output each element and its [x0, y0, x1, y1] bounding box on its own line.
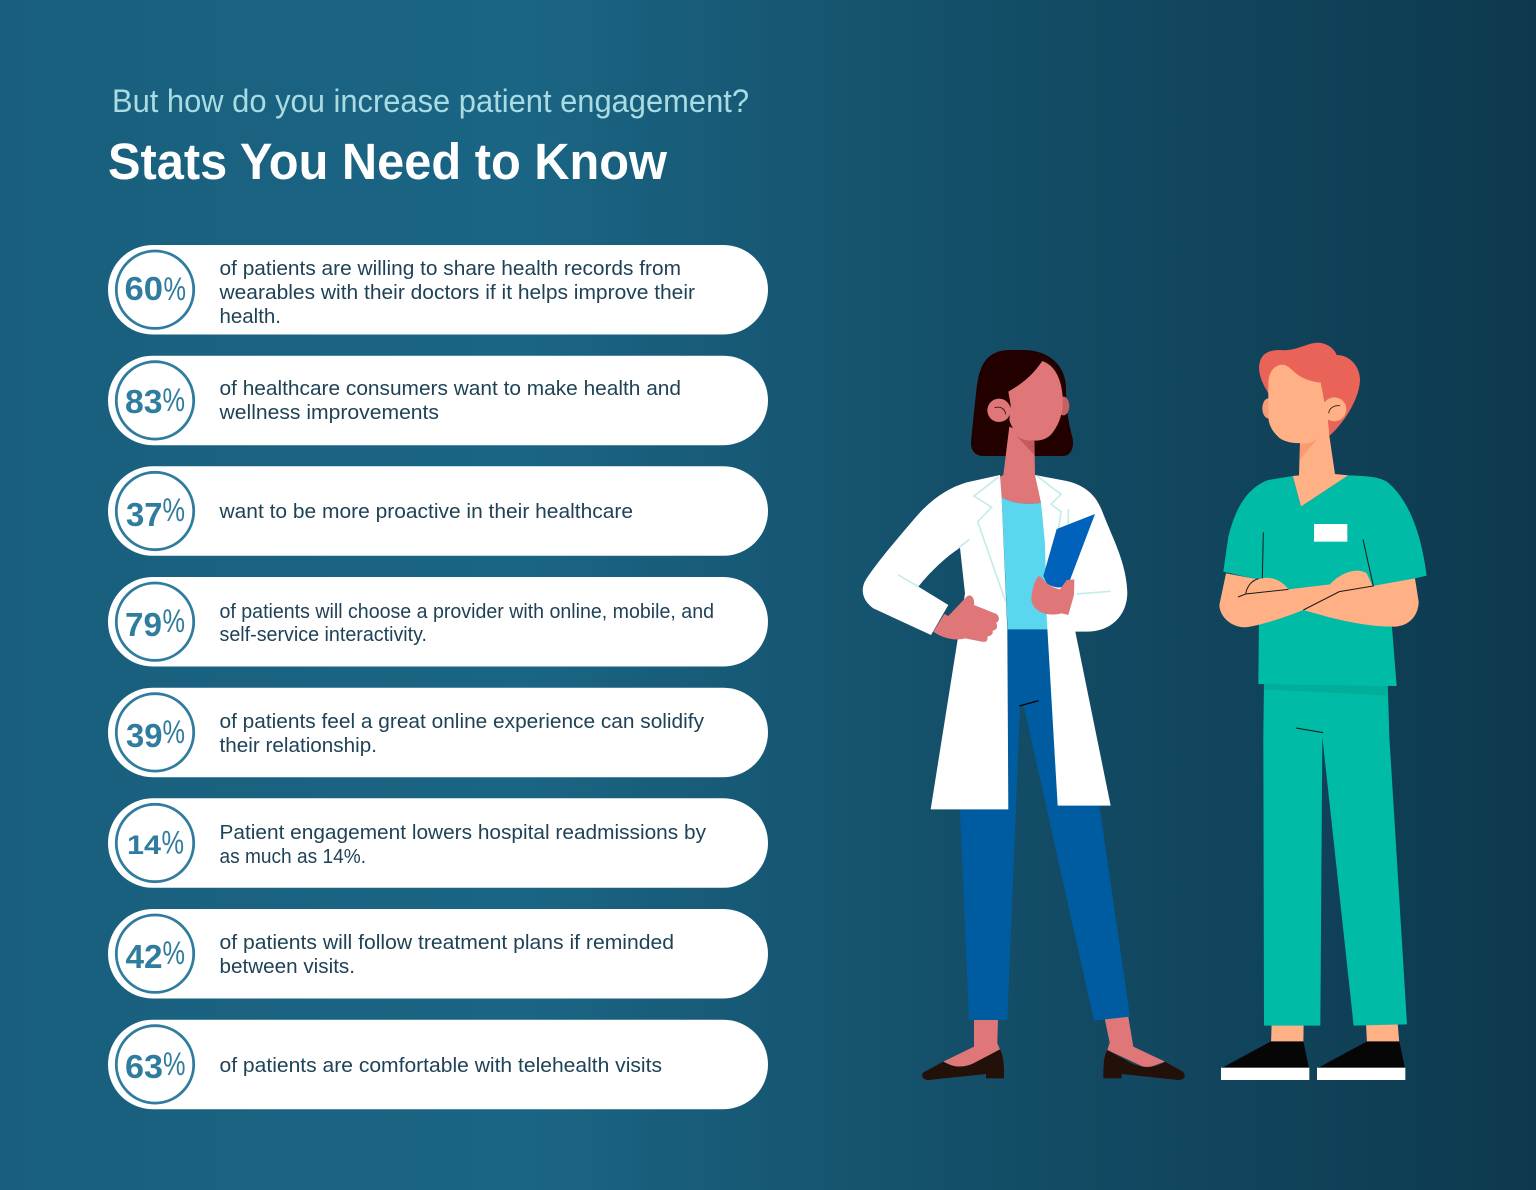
stat 60%: %	[164, 271, 186, 307]
stat 39%: their relationship.	[220, 734, 377, 757]
doctor legs and shoes	[922, 630, 1185, 1080]
nurse legs and shoes	[1221, 680, 1407, 1080]
stat 39%: of patients feel a great online experience can solidify	[220, 710, 705, 733]
stat 63%: 63	[125, 1048, 163, 1085]
stat 60%: wearables with their doctors if it helps improve their	[218, 281, 695, 304]
stat 60%	[108, 245, 768, 334]
stat 39%: 39	[126, 717, 162, 754]
stat 39%: %	[162, 714, 185, 750]
stat 42%: of patients will follow treatment plans if reminded	[220, 931, 674, 954]
stat 14%: 14	[127, 830, 161, 860]
stat 14%: %	[162, 824, 184, 860]
illustration: female doctor	[863, 350, 1185, 1080]
stat 79%: %	[162, 603, 185, 639]
stat 83%: of healthcare consumers want to make health and	[220, 377, 681, 400]
subtitle: But how do you increase patient engagement?	[112, 83, 749, 119]
nurse upper body	[1219, 343, 1427, 686]
stat 37%	[108, 466, 768, 556]
stat 83%: wellness improvements	[218, 401, 439, 424]
stat 42%: 42	[126, 938, 162, 975]
stat 42%	[108, 909, 768, 998]
stat 63%: of patients are comfortable with telehealth visits	[220, 1054, 662, 1077]
stat 42%: %	[162, 935, 185, 971]
stat 14%	[108, 798, 768, 888]
stat 39%	[108, 688, 768, 777]
illustration: male nurse	[1219, 343, 1427, 1080]
stat 14%: as much as 14%.	[220, 845, 366, 868]
stat 79%: of patients will choose a provider with online, mobile, and	[220, 600, 714, 623]
stat 79%	[108, 577, 768, 666]
stat 79%: 79	[125, 606, 162, 643]
stat 60%: health.	[220, 305, 281, 328]
stat 60%: of patients are willing to share health records from	[220, 257, 681, 280]
doctor upper body	[863, 350, 1127, 809]
stat 37%: %	[162, 492, 185, 528]
stat 63%	[108, 1020, 768, 1109]
stat 79%: self-service interactivity.	[220, 623, 427, 646]
stat list	[108, 245, 768, 1109]
stat 42%: between visits.	[220, 955, 355, 978]
stat 83%	[108, 356, 768, 445]
stat 83%: 83	[125, 383, 162, 420]
stat 63%: %	[163, 1046, 186, 1082]
stat 14%: Patient engagement lowers hospital readmissions by	[220, 821, 707, 844]
title: Stats You Need to Know	[108, 133, 667, 190]
stat 37%: 37	[126, 496, 162, 533]
stat 83%: %	[162, 382, 185, 418]
stat 60%: 60	[124, 270, 163, 307]
stat 37%: want to be more proactive in their healthcare	[218, 500, 633, 523]
